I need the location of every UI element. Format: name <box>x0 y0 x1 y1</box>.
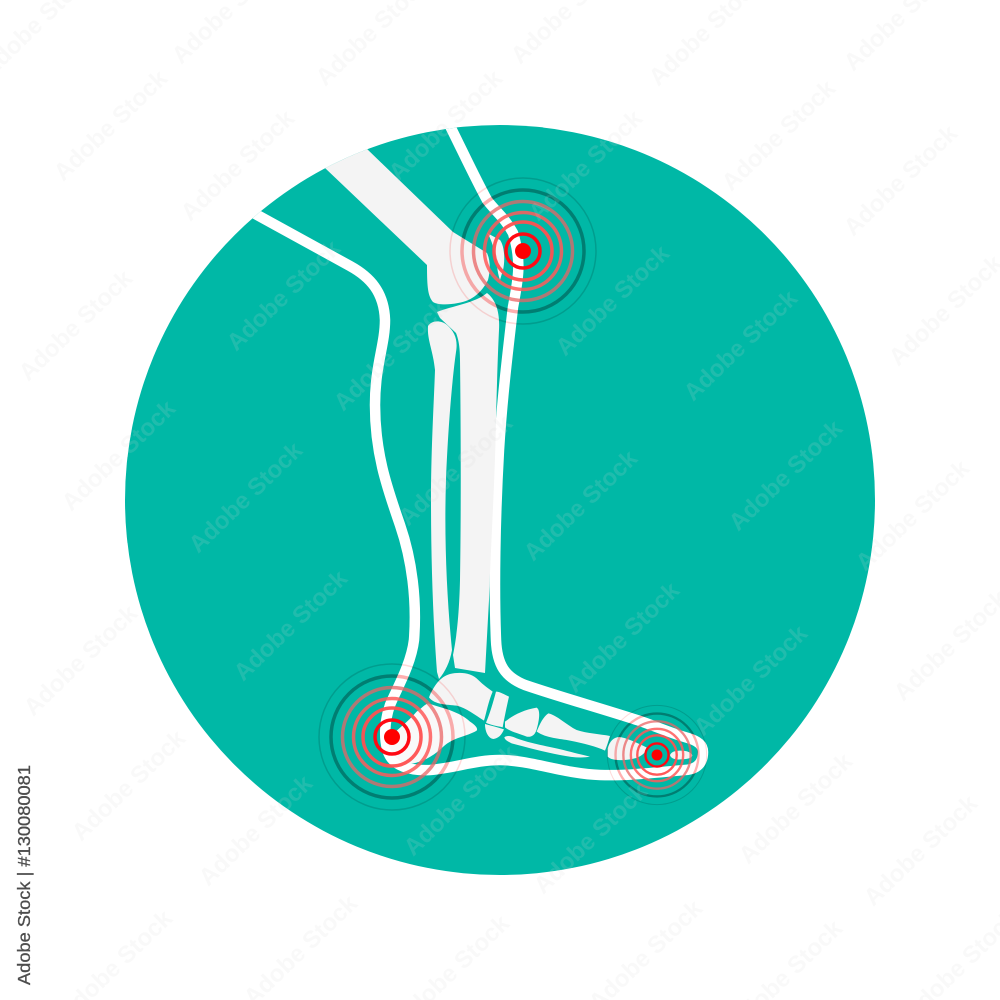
stock watermarks: Adobe Stock <box>734 747 858 869</box>
fibula bone <box>428 321 457 679</box>
stock watermarks: Adobe Stock <box>394 409 518 531</box>
infographic: leg joint pain <box>16 125 875 986</box>
stock watermarks: Adobe Stock <box>689 619 813 741</box>
stock watermarks: Adobe Stock <box>839 119 963 241</box>
teal background circle <box>125 125 875 875</box>
tibia bone <box>437 293 499 673</box>
stock watermarks: Adobe Stock <box>67 724 191 846</box>
talus <box>429 673 493 721</box>
stock watermarks: Adobe Stock <box>57 394 181 516</box>
stock watermarks: Adobe Stock <box>399 739 523 861</box>
stock watermarks: Adobe Stock <box>384 64 508 186</box>
stock watermarks: Adobe Stock <box>519 444 643 566</box>
calcaneus <box>387 703 477 764</box>
stock watermarks: Adobe Stock <box>222 234 346 356</box>
stock watermarks: Adobe Stock <box>19 599 143 721</box>
stock watermarks: Adobe Stock <box>184 436 308 558</box>
stock watermarks: Adobe Stock <box>329 294 453 416</box>
navicular <box>486 692 509 727</box>
stock watermarks: Adobe Stock <box>717 74 841 196</box>
stock watermarks: Adobe Stock <box>724 414 848 536</box>
foot bones <box>387 673 692 764</box>
stock watermarks: Adobe Stock <box>561 576 685 698</box>
stock watermarks: Adobe Stock <box>524 104 648 226</box>
stock watermarks: Adobe Stock <box>859 789 983 911</box>
stock watermarks: Adobe Stock <box>551 239 675 361</box>
metatarsal upper <box>537 713 610 751</box>
pain marker: knee <box>450 178 596 324</box>
pain marker: ankle <box>319 664 465 810</box>
stock watermarks: Adobe Stock <box>49 64 173 186</box>
stock watermarks: Adobe Stock <box>529 777 653 899</box>
stock watermarks: Adobe Stock <box>851 454 975 576</box>
leg illustration <box>250 126 703 775</box>
stock watermarks: Adobe Stock <box>679 284 803 406</box>
stock id caption: Adobe Stock | #130080081 <box>14 765 34 985</box>
stock watermarks: Adobe Stock <box>229 564 353 686</box>
toe phalanx rear <box>608 737 648 760</box>
femur bone <box>325 148 490 304</box>
leg outline <box>250 126 703 775</box>
stock watermarks: Adobe Stock <box>14 264 138 386</box>
stock watermarks: Adobe Stock <box>176 104 300 226</box>
patella <box>487 233 504 280</box>
metatarsal lower <box>504 736 590 757</box>
cuneiform <box>505 708 539 737</box>
toe phalanx front <box>670 751 692 759</box>
pain marker: toe <box>607 705 707 805</box>
stock watermarks: Adobe Stock <box>194 769 318 891</box>
small tarsal <box>485 724 504 739</box>
